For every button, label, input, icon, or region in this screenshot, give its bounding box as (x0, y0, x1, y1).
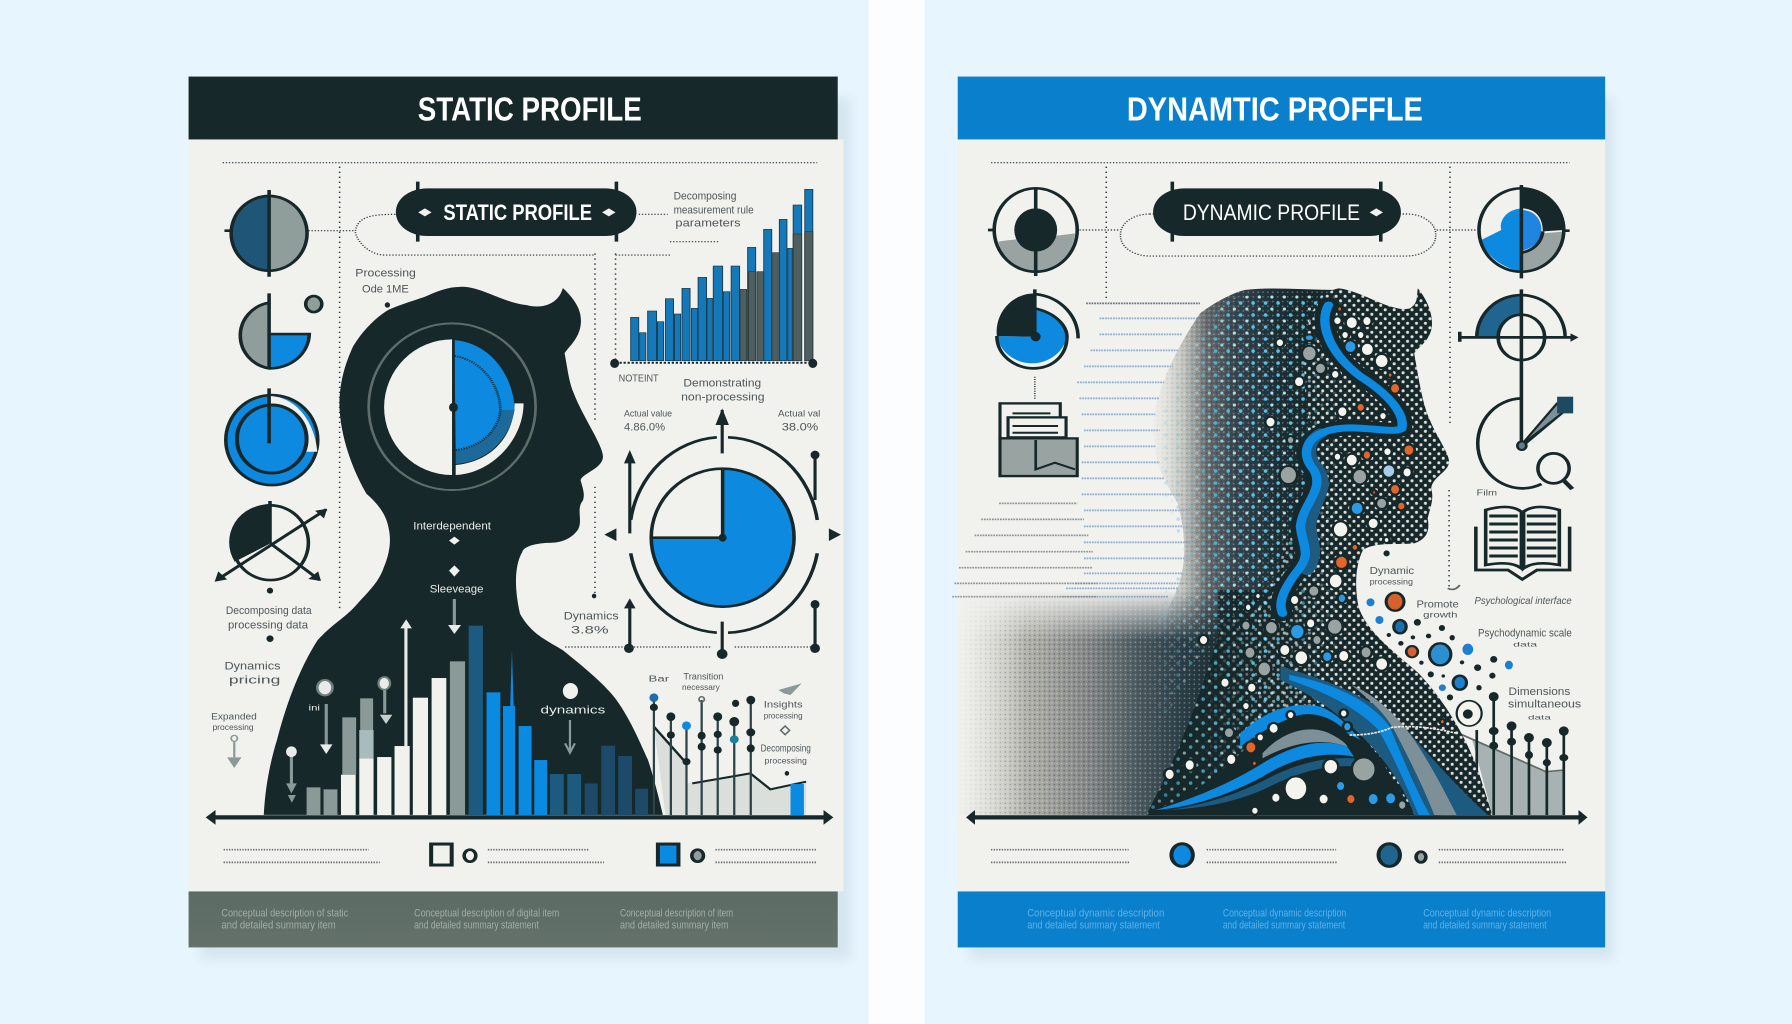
labels: static panel: Transition (683, 671, 723, 681)
footer text: dynamic: and detailed summary statement (1027, 919, 1160, 931)
head pie chart (369, 323, 536, 490)
footer band (189, 891, 838, 947)
labels: static panel: NOTEINT (619, 374, 659, 385)
axis (206, 810, 833, 825)
panel shadow (200, 97, 851, 960)
scatter dots beside neck (1366, 550, 1513, 726)
icon: target ring (988, 188, 1077, 276)
footer text: static: and detailed summary statement (414, 919, 539, 931)
labels: static panel: parameters (675, 217, 741, 229)
labels: static panel: Insights (764, 699, 803, 709)
labels: static panel: processing (212, 723, 254, 732)
bar chart: rising bars (610, 189, 817, 368)
pie chart: quadrant dial (565, 408, 841, 659)
icons: dynamic left column (988, 188, 1078, 476)
labels: dynamic panel: data (1513, 642, 1537, 649)
legend (991, 844, 1566, 866)
lollipop chart: static (649, 683, 806, 815)
labels: static panel: 38.0% (782, 422, 818, 434)
pill: dynamic profile (1153, 182, 1401, 242)
labels: static panel: Bar (649, 675, 670, 684)
labels: static panel: ini (309, 704, 320, 713)
labels: dynamic panel: Dynamic (1370, 566, 1414, 577)
labels: dynamic panel: simultaneous (1508, 699, 1581, 711)
footer text: static: Conceptual description of item (620, 908, 733, 920)
labels: static panel (211, 190, 820, 765)
dense dark region (1146, 288, 1492, 815)
icon: arrow pie (215, 501, 327, 582)
river: main stream (1281, 305, 1402, 613)
labels: dynamic panel: processing (1370, 578, 1413, 587)
bubbles: head (1265, 306, 1415, 543)
footer text: static: and detailed summary item (221, 919, 336, 931)
icon: quarter pie (240, 293, 322, 368)
labels: static panel: Dynamics (564, 610, 619, 622)
labels: static panel: Actual val (778, 409, 820, 419)
labels: static panel: Decomposing (761, 744, 811, 755)
labels: static panel: necessary (682, 683, 720, 692)
panel: dynamic profile (950, 77, 1614, 960)
labels: static panel: Decomposing (674, 190, 736, 202)
arrows and markers (227, 302, 578, 803)
labels: static panel: 3.8% (571, 624, 609, 636)
halftone body mass (950, 590, 1441, 815)
labels: dynamic panel: data (1528, 714, 1551, 721)
silhouette: dynamic head and body (950, 288, 1492, 815)
labels: dynamic panel: Film (1477, 489, 1498, 498)
labels: static panel: pricing (229, 674, 280, 686)
labels: dynamic panel: growth (1423, 611, 1457, 620)
panel paper (189, 139, 843, 891)
white dot field (1206, 288, 1492, 815)
labels: dynamic panel: Promote (1416, 599, 1459, 610)
pill label: DYNAMIC PROFILE (1183, 200, 1360, 225)
icon: crosshair (1459, 289, 1579, 443)
legend (224, 844, 816, 865)
bar chart: body bars (307, 619, 648, 815)
white arrow (400, 619, 412, 747)
labels: static panel: 4.86.0% (624, 422, 665, 434)
footer text: static (221, 908, 733, 931)
footer text: static: Conceptual description of digital item (414, 908, 559, 920)
labels: static panel: processing data (228, 619, 309, 631)
pill label: STATIC PROFILE (443, 200, 592, 225)
footer text: static: Conceptual description of static (221, 908, 348, 920)
title: STATIC PROFILE (418, 92, 642, 129)
icon: search gauge (1478, 397, 1573, 489)
icon column: left pies (215, 190, 327, 582)
footer text: dynamic: and detailed summary statement (1423, 919, 1547, 931)
lollipop chart: dynamic (1459, 692, 1569, 815)
footer text: dynamic: and detailed summary statement (1223, 919, 1346, 931)
labels: static panel: non-processing (681, 392, 765, 404)
labels: dynamic panel: Dimensions (1509, 686, 1571, 698)
silhouette: static head (264, 287, 663, 815)
labels: static panel: processing (764, 711, 803, 720)
labels: static panel: Processing (355, 268, 416, 280)
footer band (958, 891, 1605, 947)
bubbles: body (1164, 544, 1445, 815)
frame guides (223, 163, 817, 608)
labels: dynamic panel (1370, 489, 1581, 721)
footer text: dynamic (1027, 908, 1551, 931)
labels: static panel: Decomposing data (226, 605, 312, 617)
title: DYNAMTIC PROFFLE (1127, 92, 1423, 129)
icon: mixed pie (1479, 185, 1570, 278)
labels: static panel: Sleeveage (430, 584, 483, 596)
labels: static panel: dynamics (541, 704, 606, 716)
teal dots on dark (1146, 289, 1348, 815)
labels: static panel: Actual value (624, 409, 672, 419)
river: lower flows (1155, 667, 1488, 815)
labels: static panel: Interdependent (413, 520, 492, 532)
horizontal streak lines (952, 303, 1200, 597)
panel paper (958, 139, 1605, 891)
axis (966, 810, 1587, 825)
footer text: static: and detailed summary item (620, 919, 729, 931)
icon: half pie (224, 190, 307, 277)
pill: static profile (396, 182, 636, 242)
frame guides (991, 163, 1570, 588)
header band (189, 77, 838, 139)
footer text: dynamic: Conceptual dynamic description (1423, 908, 1551, 920)
teal dot field (1152, 292, 1324, 760)
panel: static profile (189, 77, 851, 960)
icon: open book (1476, 507, 1570, 579)
labels: dynamic panel: Psychological interface (1475, 596, 1572, 607)
labels: static panel: Ode 1ME (362, 283, 409, 295)
icon: folder with papers (1000, 403, 1077, 476)
icon: ring gauge (226, 388, 318, 485)
labels: static panel: processing (765, 755, 807, 765)
halftone head mass (1156, 288, 1334, 638)
icons: dynamic right column (1459, 185, 1579, 489)
labels: static panel: Dynamics (224, 660, 281, 672)
panel shadow (969, 97, 1614, 960)
labels: static panel: Expanded (211, 711, 257, 721)
icon: blue pie with arc (997, 289, 1078, 368)
labels: static panel: Demonstrating (683, 378, 761, 390)
footer text: dynamic: Conceptual dynamic description (1223, 908, 1346, 920)
header band (958, 77, 1605, 139)
labels: dynamic panel: Psychodynamic scale (1478, 628, 1572, 640)
footer text: dynamic: Conceptual dynamic description (1027, 908, 1164, 920)
labels: static panel: measurement rule (674, 204, 754, 216)
